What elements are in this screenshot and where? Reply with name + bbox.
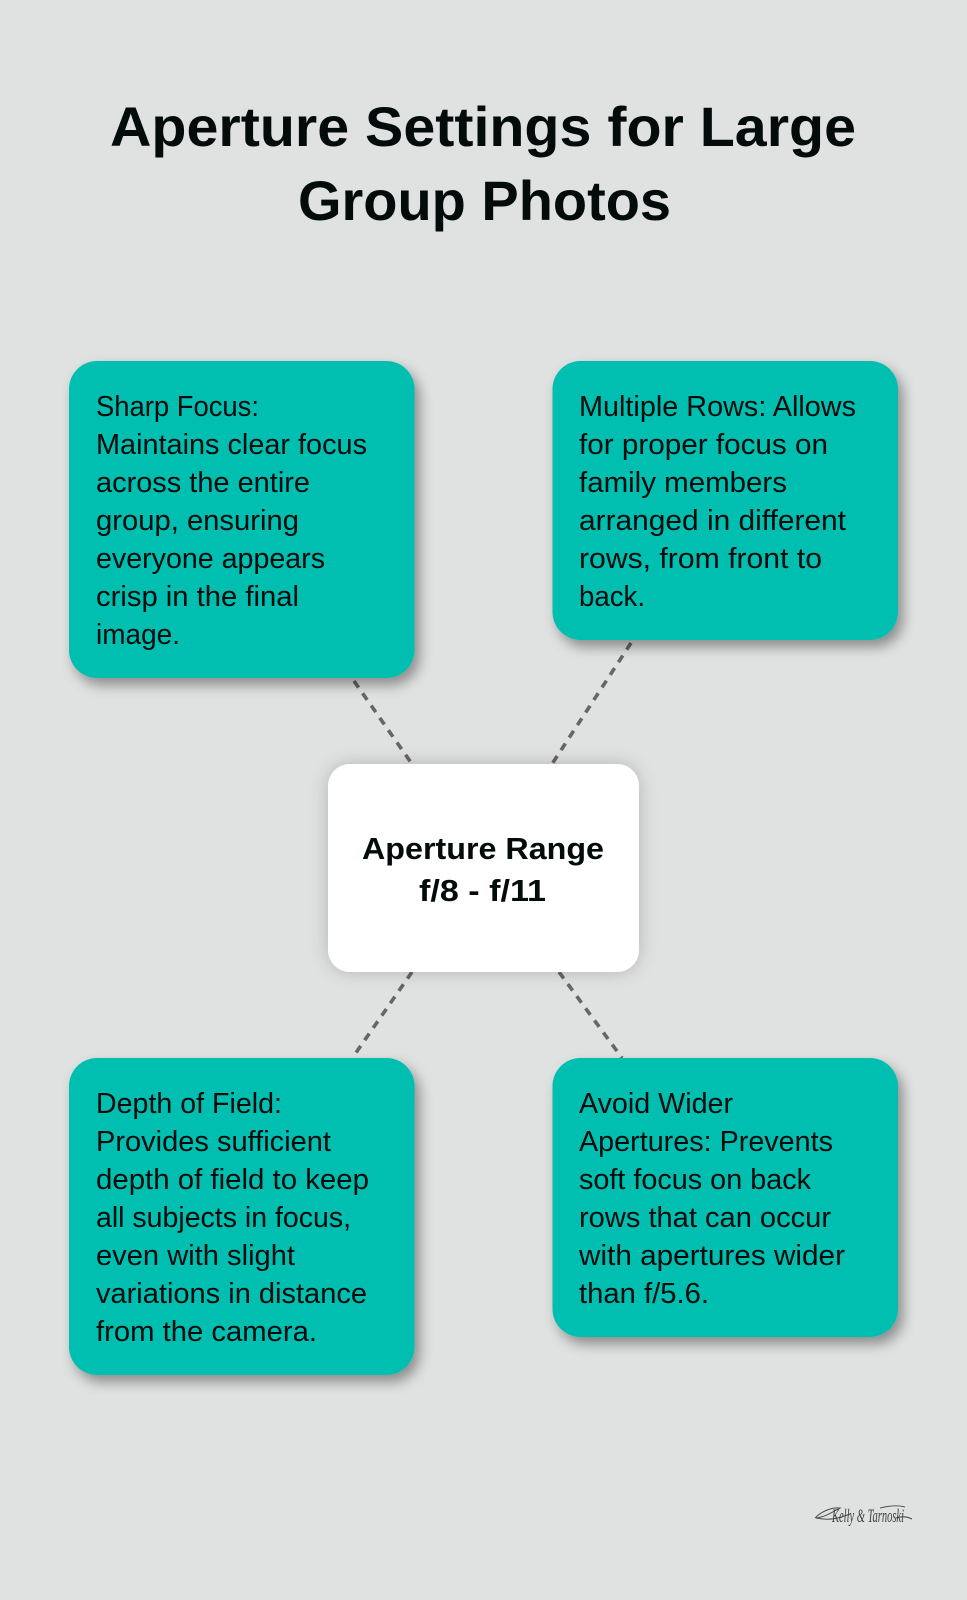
connector: sharp focus to centre [354,681,412,764]
panel: multiple rows: family members [579,467,787,499]
panel: depth of field: even with slight [96,1240,295,1272]
panel: sharp focus: across the entire [96,467,310,499]
title: Aperture Settings for Large [110,95,856,158]
panel: depth of field: Provides sufficient [96,1126,331,1158]
panel: sharp focus: everyone appears [96,543,325,575]
connector: multiple rows to centre [552,643,631,764]
panel: avoid wider apertures: rows that can occur [579,1202,832,1234]
panel: sharp focus: image. [96,619,180,651]
panel: avoid wider apertures: with apertures wider [578,1240,846,1272]
panel: multiple rows: arranged in different [579,505,846,537]
panel: aperture range centre: f/8 - f/11 [419,873,546,908]
panel: sharp focus: Maintains clear focus [96,429,367,461]
connector: depth of field to centre [353,972,412,1057]
panel: multiple rows: back. [579,581,645,613]
panel: avoid wider apertures: soft focus on back [579,1164,812,1196]
panel: avoid wider apertures: Avoid Wider [579,1088,734,1120]
panel: depth of field: depth of field to keep [96,1164,369,1196]
panel: aperture range centre: Aperture Range [362,831,604,866]
panel: avoid wider apertures [552,1058,898,1337]
panel: depth of field: all subjects in focus, [96,1202,351,1234]
panel: depth of field: from the camera. [96,1316,317,1348]
panel: depth of field: Depth of Field: [96,1088,282,1120]
panel: sharp focus: crisp in the final [96,581,299,613]
panel: multiple rows: for proper focus on [579,429,828,461]
logo: signature [815,1506,912,1527]
panel: multiple rows: Multiple Rows: Allows [579,391,856,423]
title [110,95,856,232]
panel: depth of field: variations in distance [96,1278,367,1310]
panel: sharp focus: Sharp Focus: [96,391,259,423]
logo: signature: Kelly & Tarnoski [831,1506,904,1527]
panel: sharp focus [69,361,414,678]
panel: multiple rows [552,361,898,640]
panel: sharp focus: group, ensuring [96,505,299,537]
panel: multiple rows: rows, from front to [579,543,822,575]
panel: aperture range centre [328,764,639,972]
panel: depth of field [69,1058,414,1375]
connector: avoid wider apertures to centre [559,972,622,1058]
title: Group Photos [298,169,671,232]
panel: avoid wider apertures: Apertures: Prevents [579,1126,833,1158]
panel: avoid wider apertures: than f/5.6. [579,1278,709,1310]
